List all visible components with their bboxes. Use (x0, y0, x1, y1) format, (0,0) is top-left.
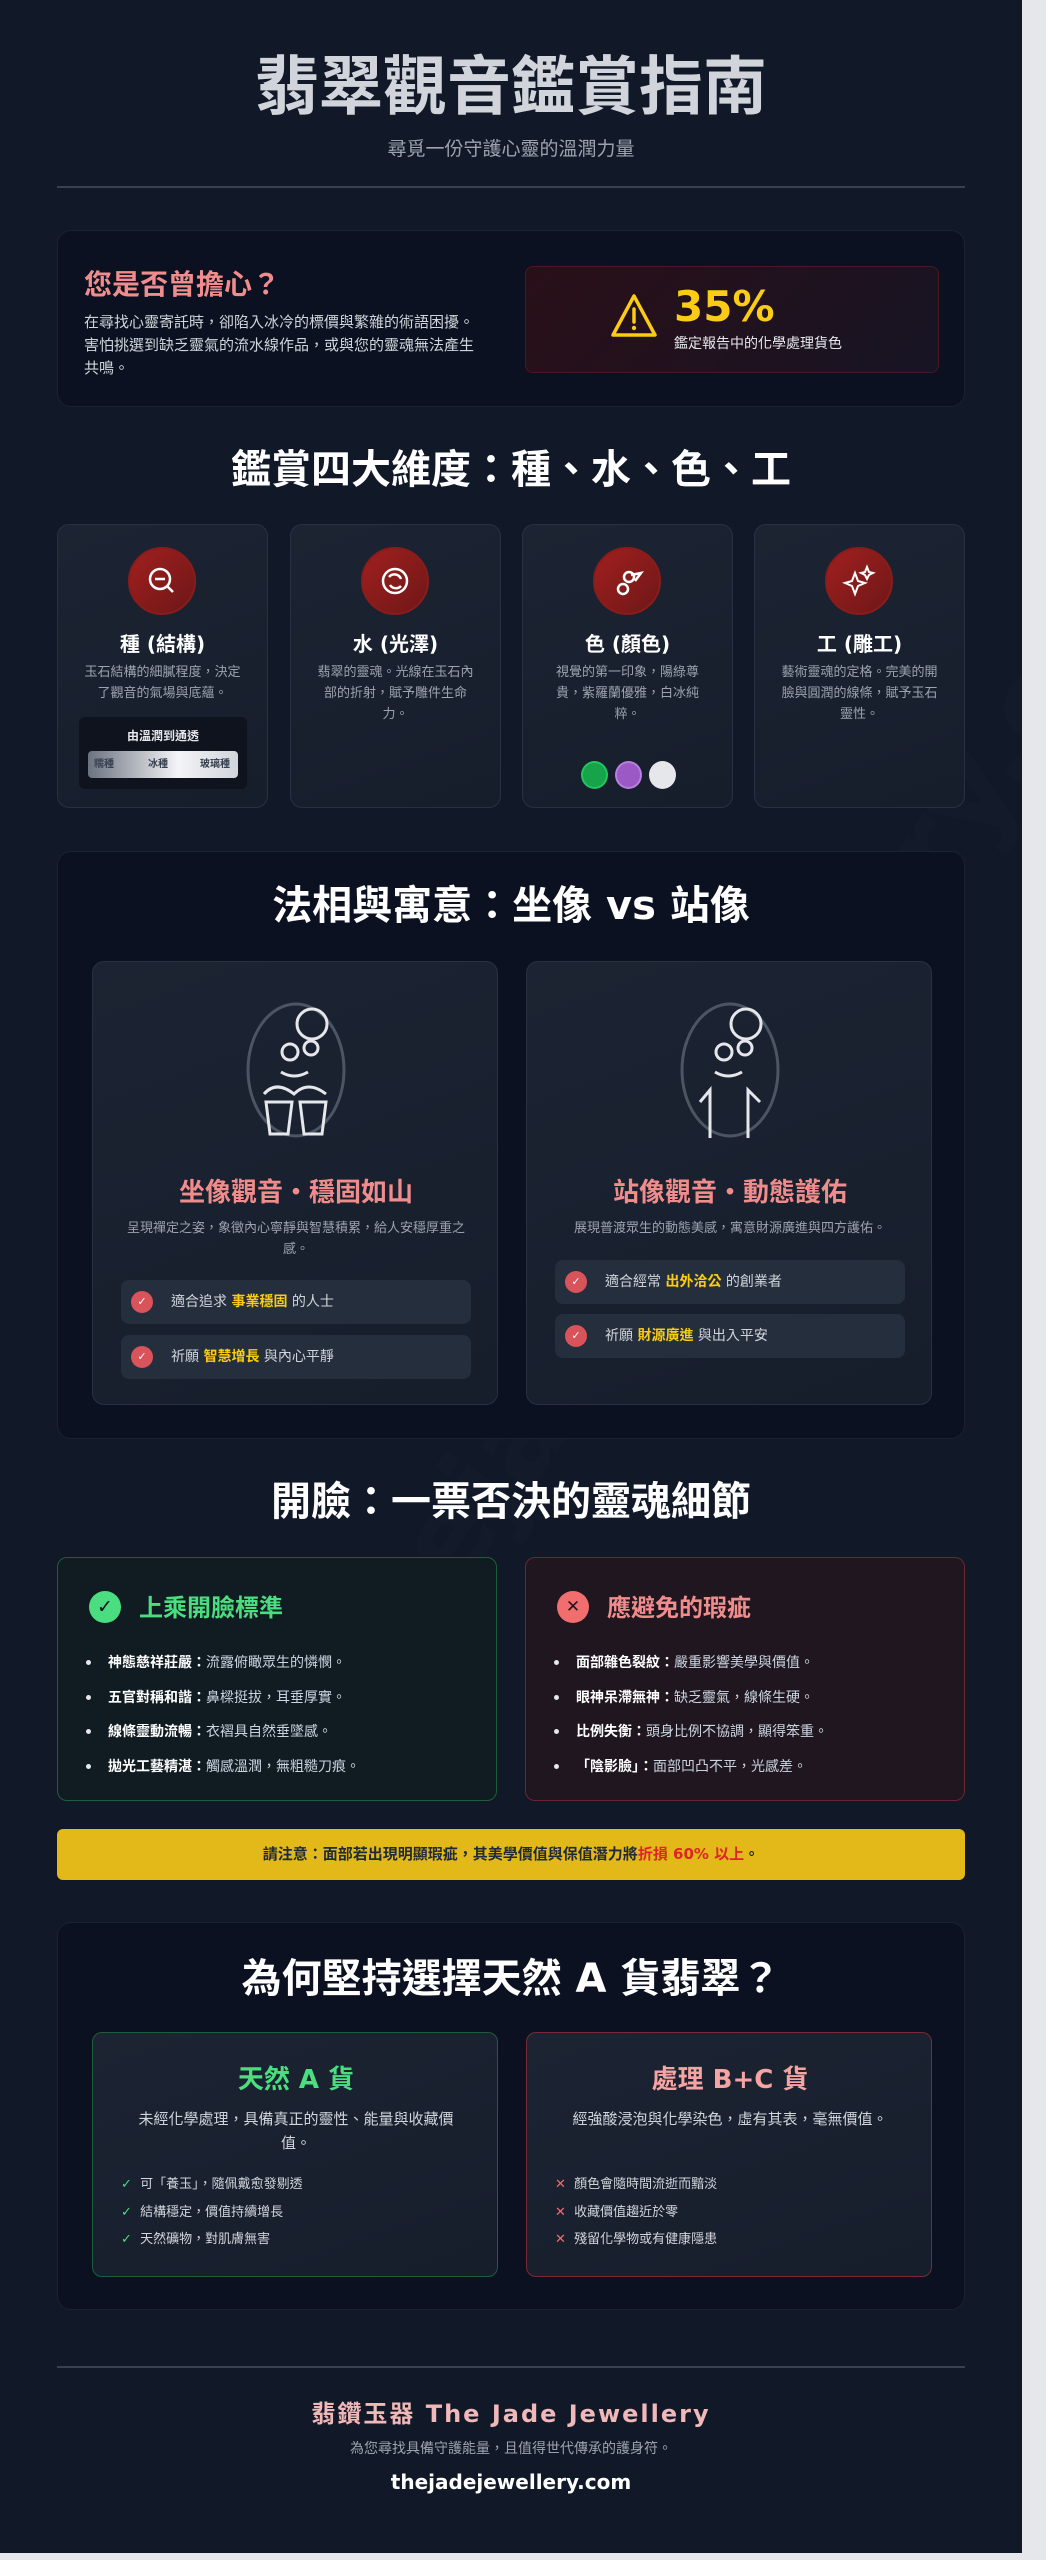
check list: ✓ 天然礦物，對肌膚無害 (121, 2232, 270, 2247)
card: seated: 坐像觀音・穩固如山 (179, 1178, 413, 1208)
cross list: ✕ 顏色會隨時間流逝而黯淡 (555, 2177, 717, 2192)
icon: standing guanyin (680, 1002, 780, 1138)
list: 面部雜色裂紋：嚴重影響美學與價值。 (576, 1655, 814, 1671)
list (554, 1654, 828, 1774)
item: 適合追求 事業穩固 的人士 (171, 1294, 334, 1310)
texture scale (79, 717, 247, 789)
item (121, 1335, 471, 1379)
list: 比例失衡：頭身比例不協調，顯得笨重。 (576, 1724, 828, 1740)
card: A jade (92, 2032, 498, 2277)
title: 翡翠觀音鑑賞指南 (255, 51, 767, 125)
panel: worry (57, 230, 965, 407)
item: ✓ (571, 1275, 581, 1288)
card: standing: 站像觀音・動態護佑 (613, 1178, 847, 1208)
heading: 為何堅持選擇天然 A 貨翡翠？ (242, 1956, 780, 2002)
list: 拋光工藝精湛：觸感溫潤，無粗糙刀痕。 (108, 1758, 360, 1774)
cross list: ✕ 殘留化學物或有健康隱患 (555, 2232, 717, 2247)
texture scale: 糯種 (94, 759, 114, 770)
icon: cross: ✕ (566, 1597, 580, 1617)
card: standing (526, 961, 932, 1405)
card: 工: 藝術靈魂的定格。完美的開臉與圓潤的線條，賦予玉石靈性。 (781, 665, 938, 722)
stat label: 鑑定報告中的化學處理貨色 (674, 336, 842, 352)
card: 水 (290, 524, 501, 808)
icon: palette (593, 547, 661, 615)
item: ✓ (571, 1329, 581, 1342)
card: B+C jade: 處理 B+C 貨 (652, 2065, 808, 2095)
worry text: 在尋找心靈寄託時，卻陷入冰冷的標價與繁雜的術語困擾。害怕挑選到缺乏靈氣的流水線作品，或與您的靈魂無法產生共鳴。 (84, 313, 474, 377)
item: 適合經常 出外洽公 的創業者 (605, 1274, 782, 1290)
item (121, 1280, 471, 1324)
card: seated (92, 961, 498, 1405)
callout: warning bar (57, 1829, 965, 1880)
card: standing: 展現普渡眾生的動態美感，寓意財源廣進與四方護佑。 (574, 1221, 886, 1236)
card: 色: 視覺的第一印象，陽綠尊貴，紫羅蘭優雅，白冰純粹。 (556, 665, 699, 722)
card: A jade: 未經化學處理，具備真正的靈性、能量與收藏價值。 (138, 2110, 454, 2152)
icon: magnifier (128, 547, 196, 615)
list: 線條靈動流暢：衣褶具自然垂墜感。 (108, 1724, 332, 1740)
heading: 法相與寓意：坐像 vs 站像 (272, 883, 750, 929)
texture scale: 玻璃種 (200, 759, 230, 770)
cross list (555, 2176, 717, 2247)
item: ✓ (137, 1295, 147, 1308)
card: 工 (754, 524, 965, 808)
list (86, 1654, 360, 1774)
list: 眼神呆滯無神：缺乏靈氣，線條生硬。 (576, 1690, 814, 1706)
card: 色 (522, 524, 733, 808)
cross list: ✕ 收藏價值趨近於零 (555, 2204, 678, 2220)
panel: why A jade (57, 1922, 965, 2310)
heading: four dimensions: 鑑賞四大維度：種、水、色、工 (231, 447, 791, 493)
card: B+C jade: 經強酸浸泡與化學染色，虛有其表，毫無價值。 (572, 2110, 888, 2128)
card: 種: 玉石結構的細膩程度，決定了觀音的氣場與底蘊。 (84, 665, 240, 701)
check list: ✓ 可「養玉」，隨佩戴愈發剔透 (121, 2177, 303, 2192)
card: good standards (57, 1557, 497, 1801)
item: 祈願 財源廣進 與出入平安 (605, 1328, 768, 1344)
footer tagline: 為您尋找具備守護能量，且值得世代傳承的護身符。 (350, 2441, 672, 2457)
card: 水: 水 (光澤) (353, 632, 438, 656)
icon: water (361, 547, 429, 615)
worry heading: 您是否曾擔心？ (84, 268, 280, 301)
icon: cross (557, 1591, 589, 1623)
footer url: thejadejewellery.com (391, 2470, 631, 2494)
card: 種 (57, 524, 268, 808)
item (555, 1260, 905, 1304)
list: 五官對稱和諧：鼻樑挺拔，耳垂厚實。 (108, 1690, 346, 1706)
icon: warning (611, 294, 657, 337)
card: 色: 色 (顏色) (585, 632, 670, 656)
card: 種: 種 (結構) (120, 632, 205, 656)
footer brand: 翡鑽玉器 The Jade Jewellery (311, 2400, 711, 2428)
card: flaws (525, 1557, 965, 1801)
icon: sparkles (825, 547, 893, 615)
texture scale: 冰種 (148, 759, 168, 770)
icon: check (89, 1591, 121, 1623)
item: 祈願 智慧增長 與內心平靜 (171, 1349, 334, 1365)
heading: face opening: 開臉：一票否決的靈魂細節 (271, 1479, 751, 1525)
card: good standards: 上乘開臉標準 (139, 1594, 283, 1622)
card: A jade: 天然 A 貨 (238, 2065, 354, 2095)
list: 「陰影臉」：面部凹凸不平，光感差。 (576, 1758, 807, 1774)
icon: check: ✓ (97, 1596, 113, 1618)
list: 神態慈祥莊嚴：流露俯瞰眾生的憐憫。 (108, 1655, 346, 1671)
check list (121, 2176, 303, 2247)
card: flaws: 應避免的瑕疵 (607, 1594, 751, 1622)
subtitle: 尋覓一份守護心靈的溫潤力量 (387, 138, 634, 160)
stat box (525, 266, 939, 373)
item: ✓ (137, 1350, 147, 1363)
item (555, 1314, 905, 1358)
check list: ✓ 結構穩定，價值持續增長 (121, 2204, 283, 2220)
card: B+C jade (526, 2032, 932, 2277)
card: 水: 翡翠的靈魂。光線在玉石內部的折射，賦予雕件生命力。 (317, 665, 474, 722)
color swatches (581, 761, 676, 789)
panel: seated vs standing (57, 851, 965, 1439)
texture scale: 由溫潤到通透 (127, 729, 199, 743)
icon: seated guanyin (246, 1002, 346, 1138)
card: 工: 工 (雕工) (817, 632, 902, 656)
callout: warning bar: 請注意：面部若出現明顯瑕疵，其美學價值與保值潛力將折損 60% 以上。 (263, 1845, 759, 1863)
card: seated: 呈現禪定之姿，象徵內心寧靜與智慧積累，給人安穩厚重之感。 (127, 1221, 465, 1257)
stat number: 35% (674, 282, 775, 331)
